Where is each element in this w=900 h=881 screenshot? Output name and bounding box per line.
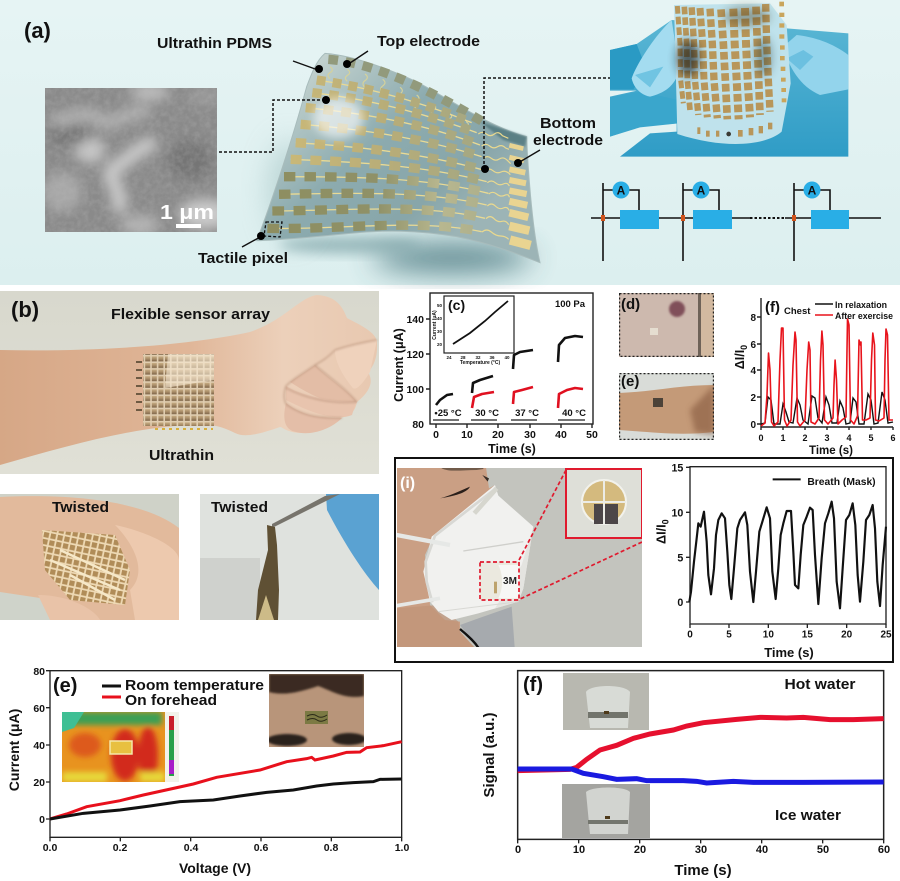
frame and curves bbox=[46, 671, 402, 841]
tick labels: 120 bbox=[406, 349, 424, 361]
label: Bottom electrode: Bottom bbox=[540, 115, 596, 132]
inset: current vs temperature: Current (μA) bbox=[432, 310, 438, 340]
label: Ultrathin PDMS: Ultrathin PDMS bbox=[157, 35, 272, 52]
ticks: 6 bbox=[750, 340, 756, 351]
curves bbox=[436, 336, 583, 408]
circuit diagram: A bbox=[697, 184, 706, 198]
tick labels: 10 bbox=[573, 844, 585, 856]
tick labels: 0 bbox=[433, 429, 439, 441]
label: Ultrathin: Ultrathin bbox=[149, 447, 214, 464]
transparent sheet bbox=[674, 3, 791, 144]
inset: current vs temperature: 40 bbox=[504, 355, 510, 360]
circuit diagram bbox=[591, 182, 881, 261]
label (i): (i) bbox=[400, 475, 415, 492]
ticks: 1 bbox=[780, 433, 786, 443]
forehead photo bbox=[269, 674, 364, 747]
panel label (f): (f) bbox=[523, 674, 543, 696]
temperature labels: •25 °C bbox=[434, 408, 462, 419]
tick labels: 50 bbox=[817, 844, 829, 856]
legend bbox=[102, 677, 264, 709]
tick labels: 80 bbox=[33, 666, 45, 678]
label: Top electrode: Top electrode bbox=[377, 33, 480, 50]
ticks: 4 bbox=[846, 433, 852, 443]
tick labels: 0.0 bbox=[43, 842, 57, 854]
ticks: 4 bbox=[750, 366, 756, 377]
ticks: 8 bbox=[750, 313, 756, 324]
mask body bbox=[423, 485, 533, 620]
chart: breath signal: 5 bbox=[677, 552, 683, 564]
panel: (f) temperature signal chart bbox=[481, 671, 890, 879]
photo: twisted on hand bbox=[0, 494, 179, 620]
thermal image bbox=[62, 712, 179, 782]
label: Twisted: Twisted bbox=[211, 499, 268, 516]
label: Chest: Chest bbox=[784, 306, 811, 317]
tick labels bbox=[515, 844, 890, 856]
tick labels: 100 bbox=[406, 384, 424, 396]
axis title: Time: Time (s) bbox=[674, 862, 732, 879]
chart: breath signal: Breath (Mask) bbox=[807, 477, 876, 488]
panel label (a): (a) bbox=[24, 18, 51, 43]
axis title: Current: Current (μA) bbox=[6, 709, 22, 791]
label: Bottom electrode bbox=[533, 115, 603, 149]
scale bar bbox=[176, 224, 201, 228]
tick labels: 30 bbox=[695, 844, 707, 856]
photo: mask wearer: 3M bbox=[503, 576, 517, 587]
axis titles: Time (s) bbox=[488, 442, 536, 456]
tick labels: 20 bbox=[33, 777, 45, 789]
tick labels: 140 bbox=[406, 314, 424, 326]
chart: breath signal: 25 bbox=[880, 630, 892, 641]
photo: gloved hands holding array bbox=[610, 2, 848, 157]
chart: breath signal: 15 bbox=[802, 630, 813, 641]
inset: current vs temperature: 50 bbox=[437, 303, 442, 308]
red trace: after exercise bbox=[761, 319, 893, 426]
panel: (e) current-voltage chart bbox=[6, 666, 409, 876]
dashed zoom callout bbox=[480, 470, 642, 600]
label (e): (e) bbox=[621, 373, 639, 390]
inset: current vs temperature: 30 bbox=[437, 329, 442, 334]
shirt bbox=[460, 607, 515, 652]
circuit diagram: A bbox=[617, 184, 626, 198]
electrode pads bbox=[677, 4, 770, 119]
inset: current vs temperature: 24 bbox=[446, 355, 452, 360]
ice water photo bbox=[562, 784, 650, 838]
temperature labels bbox=[434, 408, 586, 419]
panel: (i) mask breath monitor bbox=[395, 458, 893, 662]
tick labels: 0.6 bbox=[254, 842, 268, 854]
axis title: Voltage: Voltage (V) bbox=[179, 860, 251, 876]
chart: breath signal: 0 bbox=[677, 597, 683, 609]
photo: mask wearer bbox=[397, 468, 642, 647]
gloves base bbox=[610, 20, 848, 157]
chart: breath signal: 10 bbox=[763, 630, 774, 641]
photo: twisted with tweezers bbox=[200, 494, 379, 620]
y title: ΔI/I bbox=[733, 350, 747, 369]
scale label: 1 μm bbox=[160, 202, 214, 224]
sensor patch bbox=[136, 354, 214, 429]
ticks: 5 bbox=[868, 433, 874, 443]
panel label (f): (f) bbox=[765, 299, 780, 316]
panel label (e): (e) bbox=[53, 675, 77, 697]
ticks bbox=[750, 313, 896, 443]
chart: breath signal: 0 bbox=[687, 630, 693, 641]
tick labels: 10 bbox=[461, 429, 473, 441]
inset: current vs temperature: Temperature (°C) bbox=[460, 360, 500, 366]
frame and curves bbox=[518, 671, 884, 843]
inset: current vs temperature: 28 bbox=[460, 355, 466, 360]
tick labels bbox=[33, 666, 409, 854]
temperature labels: 30 °C bbox=[475, 408, 499, 419]
tick labels: 20 bbox=[492, 429, 504, 441]
inset: current vs temperature: 40 bbox=[437, 316, 442, 321]
tick labels bbox=[406, 314, 598, 441]
tick labels: 0 bbox=[515, 844, 521, 856]
label: Flexible sensor array: Flexible sensor array bbox=[111, 306, 271, 323]
ticks: 0 bbox=[758, 433, 764, 443]
skin bbox=[397, 465, 495, 652]
valve bbox=[480, 562, 520, 600]
tick labels: 60 bbox=[33, 703, 45, 715]
axis title: Signal: Signal (a.u.) bbox=[481, 712, 498, 798]
temperature labels: 40 °C bbox=[562, 408, 586, 419]
inset: current vs temperature: 36 bbox=[489, 355, 495, 360]
inset: current vs temperature: 20 bbox=[437, 342, 442, 347]
ticks: 3 bbox=[824, 433, 830, 443]
legend bbox=[815, 300, 893, 321]
tick labels: 40 bbox=[756, 844, 768, 856]
y title: 0 bbox=[739, 345, 749, 350]
callout leaders bbox=[219, 51, 612, 247]
inset: current vs temperature: (c) bbox=[448, 297, 465, 313]
panel: (c) current vs time chart bbox=[392, 293, 598, 456]
tick labels: 0.8 bbox=[324, 842, 338, 854]
label: Ice water: Ice water bbox=[775, 807, 841, 824]
label: Twisted: Twisted bbox=[52, 499, 109, 516]
inset: current vs temperature: 32 bbox=[475, 355, 481, 360]
photo (e): arm bbox=[619, 373, 714, 440]
temperature labels: 37 °C bbox=[515, 408, 539, 419]
ticks: 2 bbox=[750, 393, 756, 404]
legend: On forehead bbox=[125, 692, 217, 709]
SEM micrograph bbox=[45, 88, 217, 232]
straps bbox=[397, 535, 450, 545]
label: Hot water: Hot water bbox=[784, 676, 856, 693]
inset: current vs temperature bbox=[432, 296, 514, 366]
panel: (b) sensor array on wrist bbox=[0, 291, 379, 474]
panel: (a) device schematic bbox=[0, 0, 900, 285]
tick labels: 60 bbox=[878, 844, 890, 856]
tick labels: 80 bbox=[412, 419, 424, 431]
label (b): (b) bbox=[11, 297, 39, 322]
tick labels: 1.0 bbox=[395, 842, 409, 854]
circuit diagram: A bbox=[808, 184, 817, 198]
legend: After exercise bbox=[835, 311, 893, 321]
ticks: 6 bbox=[890, 433, 896, 443]
temperature arrows bbox=[433, 419, 585, 421]
hot water photo bbox=[563, 673, 649, 730]
arm and fist bbox=[0, 295, 377, 465]
flexible sheet with electrode array bbox=[257, 53, 540, 263]
tick labels: 20 bbox=[634, 844, 646, 856]
chart: breath signal: 0 bbox=[660, 519, 670, 524]
axis titles: Time (s) bbox=[809, 445, 853, 457]
label: 100 Pa: 100 Pa bbox=[555, 299, 586, 310]
chart: breath signal: 15 bbox=[671, 463, 683, 475]
label: Tactile pixel: Tactile pixel bbox=[198, 250, 288, 267]
chart: breath signal: ΔI/I bbox=[654, 524, 668, 544]
chart: breath signal: 20 bbox=[841, 630, 853, 641]
tick labels: 50 bbox=[586, 429, 598, 441]
panel: (f) chest signal chart bbox=[733, 298, 896, 457]
chart: breath signal bbox=[654, 463, 892, 660]
legend: In relaxation bbox=[835, 300, 887, 310]
label (d): (d) bbox=[621, 296, 640, 313]
ticks: 2 bbox=[802, 433, 808, 443]
tick labels: 30 bbox=[524, 429, 536, 441]
y axis title: Current (μA) bbox=[392, 328, 406, 402]
tick labels: 0.4 bbox=[184, 842, 198, 854]
label: Bottom electrode: electrode bbox=[533, 132, 603, 149]
photo (d): chest bbox=[619, 293, 714, 357]
inset: sensor close-up bbox=[566, 469, 642, 538]
ticks: 0 bbox=[750, 420, 756, 431]
chart: breath signal: 5 bbox=[726, 630, 732, 641]
chart: breath signal: 10 bbox=[671, 507, 683, 519]
tick labels: 40 bbox=[33, 740, 45, 752]
tick labels: 0.2 bbox=[113, 842, 127, 854]
black trace: relaxation bbox=[761, 392, 893, 424]
sheet shadow bbox=[268, 140, 532, 272]
tick labels: 40 bbox=[555, 429, 567, 441]
chart: breath signal: Time (s) bbox=[764, 645, 814, 660]
legend: Room temperature bbox=[125, 677, 264, 694]
tick labels: 0 bbox=[39, 814, 45, 826]
